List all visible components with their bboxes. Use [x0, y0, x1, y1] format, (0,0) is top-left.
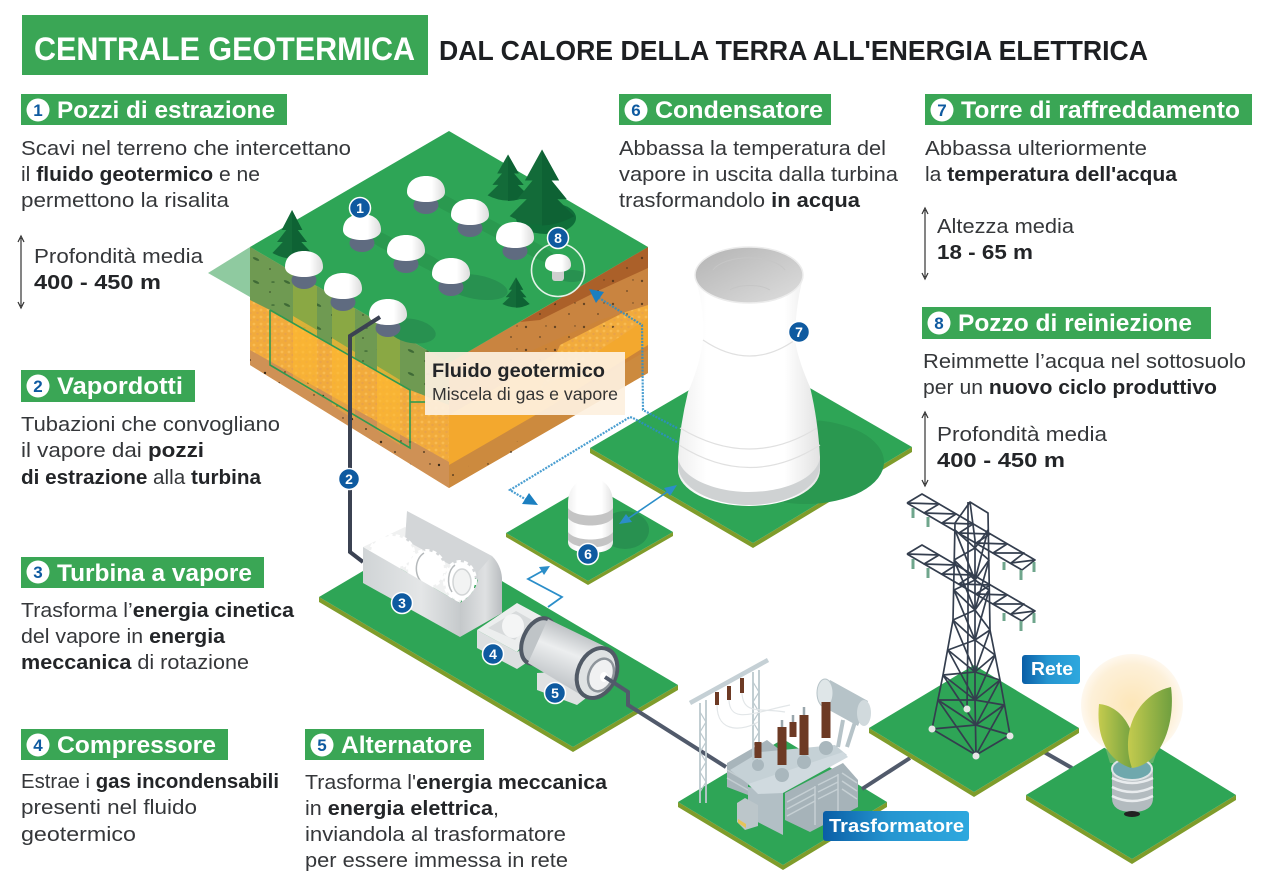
marker 8	[548, 228, 568, 248]
insulators	[913, 508, 1034, 631]
panel: 2 vapordotti: 2	[33, 377, 43, 396]
panel: 5 alternatore	[305, 729, 608, 872]
height note: torre di raffreddamento: 18 - 65 m	[937, 241, 1033, 264]
depth note: pozzo di reiniezione: 400 - 450 m	[937, 449, 1065, 472]
marker 3: 3	[398, 595, 406, 611]
panel: 6 condensatore	[619, 94, 899, 212]
cable: tower to bulb	[1044, 752, 1072, 768]
panel: 3 turbina a vapore: 3	[33, 563, 43, 582]
grass top	[250, 131, 648, 363]
dotted arrow heads	[522, 289, 604, 505]
panel: 5 alternatore: Alternatore	[341, 732, 472, 759]
depth note: pozzo di reiniezione	[922, 412, 1108, 486]
panel: 5 alternatore: in energia elettrica ,	[305, 797, 499, 820]
panel: 5 alternatore: Trasforma l'energia meccanica	[305, 771, 608, 794]
panel: 4 compressore: 4	[33, 736, 43, 755]
bulb base	[1112, 758, 1153, 817]
wires	[717, 693, 790, 728]
panel: 6 condensatore: vapore in uscita dalla turbina	[619, 163, 899, 186]
geothermal ground block	[208, 131, 648, 488]
panel: 3 turbina a vapore: del vapore in energia	[21, 625, 226, 648]
panel: 6 condensatore: Condensatore	[655, 97, 823, 124]
number markers	[338, 198, 810, 704]
back panel	[405, 511, 492, 580]
panel: 5 alternatore: per essere immessa in rete	[305, 849, 568, 872]
main tank	[748, 787, 783, 835]
fluid label: Fluido geotermico	[432, 360, 605, 382]
panel: 3 turbina a vapore: Trasforma l’energia cinetica	[21, 599, 295, 622]
marker 2: 2	[345, 471, 353, 487]
panel: 7 torre di raffreddamento	[925, 94, 1252, 186]
panel: 1 pozzi di estrazione: 1	[33, 101, 43, 120]
marker 7: 7	[795, 324, 803, 340]
gears	[371, 536, 475, 600]
panel: 8 pozzo di reiniezione	[922, 307, 1246, 399]
marker 2	[338, 468, 360, 490]
marker 1: 1	[356, 200, 364, 216]
reinjection well	[532, 244, 584, 296]
panel: 7 torre di raffreddamento: 7	[937, 101, 947, 120]
marker 6	[578, 544, 598, 564]
cable: transformer to tower	[862, 758, 910, 789]
extraction wells	[285, 176, 534, 337]
label: rete: Rete	[1031, 659, 1073, 679]
power cable to transformer	[605, 677, 726, 767]
left soil face	[250, 247, 449, 488]
cooling tower	[678, 247, 820, 506]
panel: 6 condensatore: 6	[631, 101, 641, 120]
bushings	[758, 702, 826, 765]
panel: 7 torre di raffreddamento: Torre di raffreddamento	[961, 97, 1240, 124]
marker 8: 8	[554, 230, 562, 246]
panel: 1 pozzi di estrazione: il fluido geotermico e ne	[21, 163, 260, 186]
label: trasformatore: Trasformatore	[829, 815, 964, 836]
depth note: pozzi di estrazione: Profondità media	[34, 245, 204, 268]
arms	[907, 494, 1035, 621]
height note: torre di raffreddamento	[922, 208, 1075, 279]
alternator	[515, 613, 625, 705]
pad: bulb	[1026, 731, 1236, 864]
panel: 2 vapordotti: di estrazione alla turbina	[21, 466, 262, 489]
pad: cooling tower	[590, 354, 912, 548]
end face	[460, 556, 502, 637]
panel: 7 torre di raffreddamento: la temperatura dell'acqua	[925, 163, 1178, 186]
panel: 4 compressore: presenti nel fluido	[21, 796, 197, 819]
left radiator	[727, 740, 780, 795]
depth wedge	[208, 247, 250, 297]
lid	[748, 752, 848, 794]
title: CENTRALE GEOTERMICA	[34, 31, 415, 67]
panel: 8 pozzo di reiniezione: 8	[934, 314, 944, 333]
panel: 6 condensatore: trasformandolo in acqua	[619, 189, 861, 212]
transformer	[690, 660, 871, 835]
condenser tank	[568, 478, 613, 553]
depth note: pozzi di estrazione	[18, 236, 204, 308]
top plate	[730, 745, 847, 792]
trees	[272, 150, 574, 308]
pad: transformer	[678, 739, 887, 870]
compressor	[477, 603, 543, 669]
panel: 4 compressore: Estrae i gas incondensabili	[21, 770, 279, 793]
front face	[363, 547, 460, 637]
fluid label: Miscela di gas e vapore	[432, 384, 618, 404]
panel: 4 compressore: Compressore	[57, 732, 216, 759]
panel: 4 compressore	[21, 729, 279, 846]
double arrow: condenser to tower	[619, 485, 677, 524]
light bulb with leaves	[1081, 654, 1183, 817]
conservator	[820, 680, 868, 726]
marker 6: 6	[584, 546, 592, 562]
height note: torre di raffreddamento: Altezza media	[937, 215, 1075, 238]
label: trasformatore	[823, 811, 969, 841]
steam pipe 2	[350, 317, 380, 562]
gantry insulators	[717, 678, 742, 705]
pad: pylon	[869, 665, 1079, 797]
panel: 6 condensatore: Abbassa la temperatura del	[619, 137, 886, 160]
panel: 2 vapordotti	[21, 370, 280, 489]
well shadows	[357, 185, 586, 347]
blue arrow: compressor to condenser	[528, 566, 562, 607]
control box	[737, 798, 758, 830]
marker 1	[350, 198, 370, 218]
conservator supports	[838, 720, 855, 747]
marker 3	[392, 592, 412, 614]
panel: 8 pozzo di reiniezione: Reimmette l’acqua nel sottosuolo	[923, 350, 1246, 373]
bushing bases	[752, 741, 833, 782]
panel: 5 alternatore: inviandola al trasformatore	[305, 823, 566, 846]
lattice tower	[932, 502, 1010, 755]
right radiators	[785, 763, 858, 832]
turbine	[363, 511, 502, 637]
panel: 5 alternatore: 5	[317, 736, 327, 755]
marker 4: 4	[489, 646, 497, 662]
marker 5: 5	[551, 685, 559, 701]
title	[22, 15, 428, 75]
panel: 3 turbina a vapore: Turbina a vapore	[57, 560, 252, 587]
panel: 8 pozzo di reiniezione: Pozzo di reiniezione	[958, 310, 1192, 337]
dotted flow arrows	[510, 296, 677, 502]
pad: turbine hall	[319, 535, 678, 752]
well	[363, 527, 480, 603]
pad: condenser	[506, 484, 673, 585]
label: rete	[1022, 655, 1080, 684]
marker 4	[482, 644, 504, 664]
right soil face	[449, 247, 648, 488]
yellow columns	[293, 280, 317, 395]
panel: 3 turbina a vapore: meccanica di rotazione	[21, 651, 249, 674]
panel: 2 vapordotti: il vapore dai pozzi	[21, 439, 204, 462]
leaves	[1098, 704, 1134, 768]
depth note: pozzi di estrazione: 400 - 450 m	[34, 271, 161, 294]
depth note: pozzo di reiniezione: Profondità media	[937, 423, 1108, 446]
footings	[928, 706, 1014, 760]
marker 5	[544, 682, 566, 704]
panel: 2 vapordotti: Tubazioni che convogliano	[21, 413, 280, 436]
subtitle: DAL CALORE DELLA TERRA ALL'ENERGIA ELETTRICA	[439, 35, 1148, 66]
panel: 1 pozzi di estrazione: Pozzi di estrazione	[57, 97, 275, 124]
panel: 1 pozzi di estrazione	[21, 94, 351, 212]
marker 7	[788, 322, 810, 342]
panel: 7 torre di raffreddamento: Abbassa ulteriormente	[925, 137, 1147, 160]
fluid label	[425, 352, 625, 415]
panel: 4 compressore: geotermico	[21, 823, 136, 846]
panel: 2 vapordotti: Vapordotti	[57, 373, 183, 400]
panel: 8 pozzo di reiniezione: per un nuovo ciclo produttivo	[923, 376, 1217, 399]
panel: 1 pozzi di estrazione: permettono la risalita	[21, 189, 230, 212]
gantry	[690, 660, 768, 803]
panel: 3 turbina a vapore	[21, 557, 295, 674]
panel: 1 pozzi di estrazione: Scavi nel terreno che intercettano	[21, 137, 351, 160]
electricity pylon	[907, 494, 1035, 760]
